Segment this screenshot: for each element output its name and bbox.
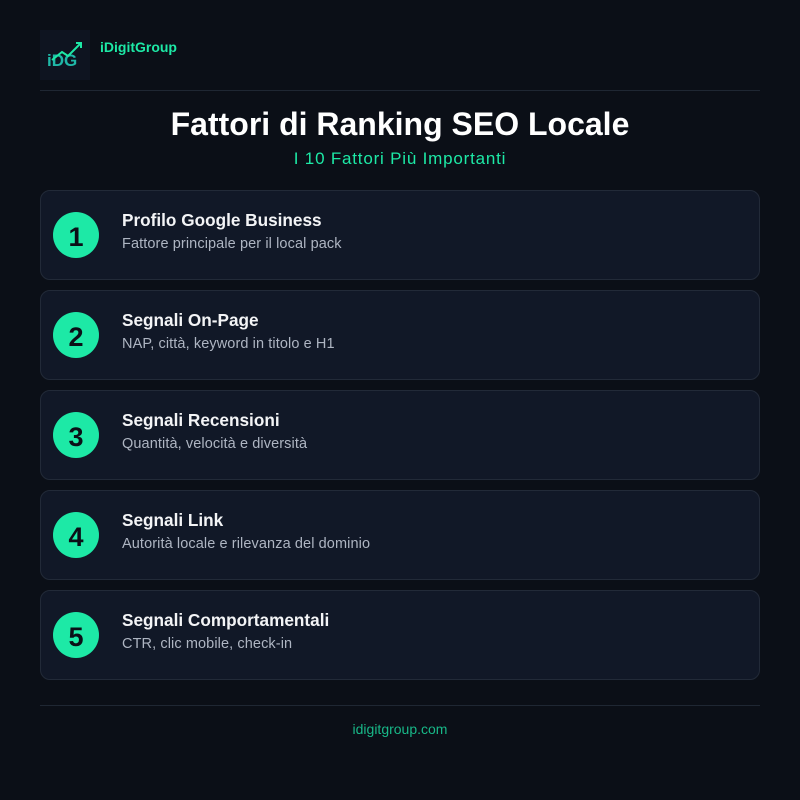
logo bbox=[40, 30, 90, 80]
card 2: Segnali On-Page bbox=[122, 310, 259, 330]
card 5: Segnali Comportamentali bbox=[122, 610, 329, 630]
card 2: NAP, città, keyword in titolo e H1 bbox=[122, 336, 335, 352]
card 4: 4 bbox=[68, 522, 84, 552]
card 1: Fattore principale per il local pack bbox=[122, 236, 342, 252]
card 5 bbox=[40, 590, 760, 680]
footer: idigitgroup.com bbox=[353, 721, 447, 737]
card 4 bbox=[40, 490, 760, 580]
title: Fattori di Ranking SEO Locale bbox=[171, 106, 629, 142]
card 2: 2 bbox=[68, 322, 84, 352]
card 3 bbox=[40, 390, 760, 480]
card 1 bbox=[40, 190, 760, 280]
card 3: 3 bbox=[68, 422, 84, 452]
brand name: iDigitGroup bbox=[100, 39, 177, 55]
card 4: Autorità locale e rilevanza del dominio bbox=[122, 536, 370, 552]
subtitle: I 10 Fattori Più Importanti bbox=[294, 149, 506, 168]
card 3: Segnali Recensioni bbox=[122, 410, 280, 430]
card 4: Segnali Link bbox=[122, 510, 223, 530]
card 1: Profilo Google Business bbox=[122, 210, 322, 230]
card 1: 1 bbox=[68, 222, 84, 252]
card 5: 5 bbox=[68, 622, 84, 652]
card 2 bbox=[40, 290, 760, 380]
card 5: CTR, clic mobile, check-in bbox=[122, 636, 292, 652]
logo: iDG bbox=[47, 51, 77, 70]
card 3: Quantità, velocità e diversità bbox=[122, 436, 307, 452]
